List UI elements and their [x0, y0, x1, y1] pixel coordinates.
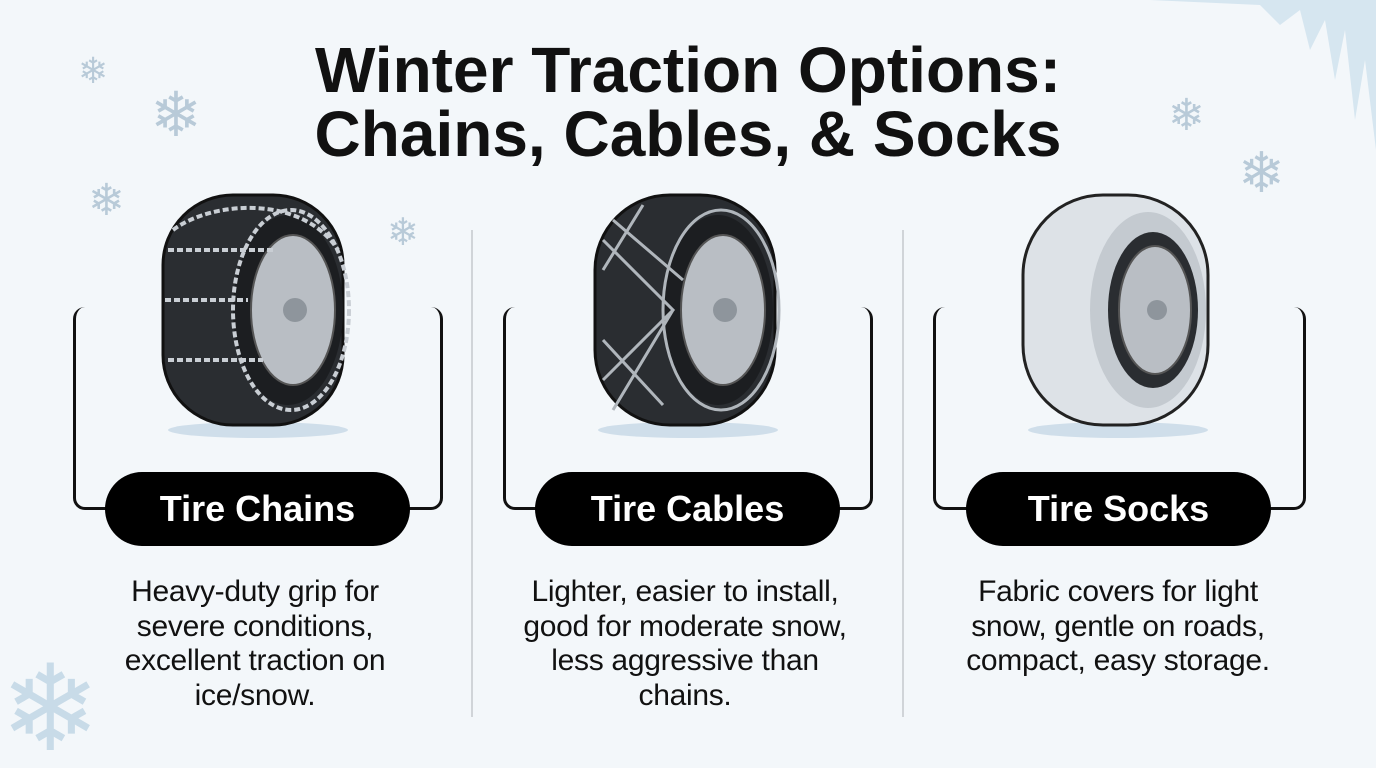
description: less aggressive than — [551, 644, 819, 677]
decorative snowflakes: ❄ — [150, 81, 202, 150]
description: severe conditions, — [137, 610, 373, 642]
decorative snowflakes: ❄ — [78, 50, 108, 91]
title — [315, 34, 1061, 170]
description: ice/snow. — [195, 678, 315, 712]
bracket — [503, 307, 873, 510]
description: Lighter, easier to install, — [531, 575, 839, 608]
label pill — [966, 472, 1271, 546]
description: good for moderate snow, — [523, 610, 847, 642]
icon: tire with sock — [1022, 194, 1210, 438]
description: Heavy-duty grip for — [131, 575, 379, 608]
title: Winter Traction Options: — [315, 34, 1061, 106]
description: chains. — [639, 678, 731, 712]
icon: tire with cables — [594, 194, 780, 438]
description: compact, easy storage. — [966, 644, 1270, 677]
title: Chains, Cables, & Socks — [315, 98, 1061, 170]
bracket — [73, 307, 443, 510]
panel: tire cables — [503, 194, 873, 712]
bracket — [933, 307, 1306, 510]
panel: tire socks — [933, 194, 1306, 677]
description: excellent traction on — [125, 644, 385, 677]
description: snow, gentle on roads, — [971, 610, 1265, 642]
label pill: Tire Socks — [1028, 488, 1209, 529]
label pill: Tire Cables — [591, 488, 784, 529]
decorative snowflakes: ❄ — [88, 176, 125, 225]
icon: tire with chains — [162, 194, 351, 438]
decorative snowflakes: ❄ — [387, 212, 419, 254]
decorative snowflakes: ❄ — [1238, 141, 1285, 204]
label pill — [535, 472, 840, 546]
icicles — [1153, 0, 1376, 149]
label pill: Tire Chains — [160, 488, 355, 529]
divider lines — [471, 230, 473, 717]
decorative snowflakes: ❄ — [1168, 91, 1205, 140]
description — [125, 575, 385, 712]
label pill — [105, 472, 410, 546]
description: Fabric covers for light — [978, 575, 1258, 608]
description — [523, 575, 847, 712]
description — [966, 575, 1270, 677]
panel: tire chains — [73, 194, 443, 712]
